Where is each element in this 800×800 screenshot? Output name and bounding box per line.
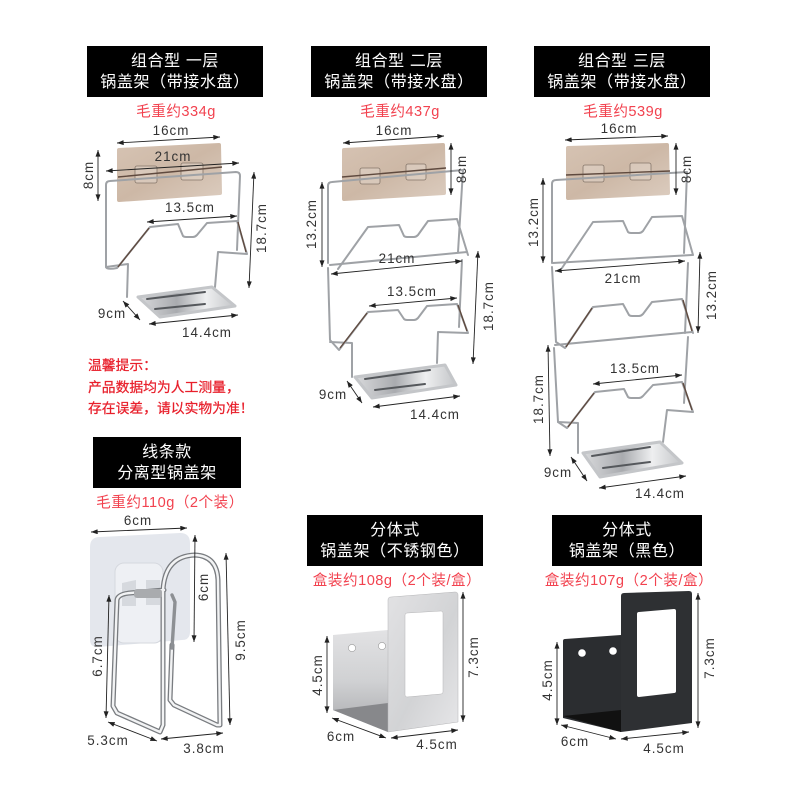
wire frame: [106, 172, 247, 297]
heading: two-tier: 组合型 二层: [355, 52, 443, 70]
dimensions: 5.3cm: [87, 733, 129, 748]
dimensions: 4.5cm: [643, 741, 685, 756]
heading: black: 锅盖架（黑色）: [569, 542, 685, 560]
dimensions: 9.5cm: [233, 619, 248, 661]
weight label: 毛重约334g: [136, 103, 216, 120]
dimensions: 14.4cm: [635, 486, 685, 501]
warm tip note: 产品数据均为人工测量，: [88, 380, 240, 395]
dimensions: [81, 123, 269, 340]
weight label: 毛重约437g: [360, 103, 440, 120]
dimensions: 21cm: [605, 271, 641, 286]
panel: line-style separate rack: [87, 437, 248, 756]
dimensions: 7.3cm: [466, 636, 481, 678]
dimensions: 6cm: [327, 729, 355, 744]
dimensions: 13.2cm: [304, 199, 319, 249]
dimensions: 13.5cm: [165, 200, 215, 215]
weight label: 盒装约107g（2个装/盒）: [545, 572, 713, 589]
dimensions: 18.7cm: [531, 374, 546, 424]
heading: stainless: 分体式: [370, 521, 420, 539]
drip tray: [355, 365, 456, 398]
adhesive plate: [566, 143, 670, 200]
dimensions: 4.5cm: [416, 737, 458, 752]
dimensions: 6.7cm: [90, 635, 105, 677]
dimensions: 3.8cm: [183, 741, 225, 756]
dimensions: 21cm: [155, 149, 191, 164]
heading: line-style: [93, 437, 241, 488]
dimensions: 6cm: [561, 734, 589, 749]
heading: line-style: 分离型锅盖架: [117, 464, 217, 482]
dimensions: 18.7cm: [254, 203, 269, 253]
adhesive plate: [342, 143, 446, 201]
heading: two-tier: 锅盖架（带接水盘）: [324, 72, 474, 91]
heading: line-style: 线条款: [142, 443, 192, 461]
heading: one-tier: 锅盖架（带接水盘）: [100, 72, 250, 91]
panel: three-tier rack: [526, 46, 719, 501]
dimensions: 13.2cm: [526, 197, 541, 247]
heading: black: 分体式: [602, 521, 652, 539]
wire frame: [328, 170, 468, 377]
black bracket product: [563, 591, 692, 732]
transparent adhesive plate: [90, 533, 190, 647]
drip tray: [583, 442, 682, 477]
dimensions: 21cm: [379, 251, 415, 266]
dimensions: 13.5cm: [387, 284, 437, 299]
dimensions: 13.2cm: [704, 270, 719, 320]
panel: stainless bracket: [307, 515, 483, 752]
dimensions: 9cm: [319, 387, 347, 402]
dimensions: 9cm: [544, 465, 572, 480]
drip tray: [138, 287, 235, 317]
dimensions: 14.4cm: [182, 325, 232, 340]
dimensions: 8cm: [679, 155, 694, 183]
heading: one-tier: [87, 46, 263, 97]
adhesive plate: [117, 143, 222, 202]
weight label: 毛重约110g（2个装）: [96, 494, 244, 511]
dimensions: 8cm: [454, 155, 469, 183]
dimensions: 18.7cm: [481, 281, 496, 331]
stainless bracket product: [333, 592, 458, 732]
heading: black: [552, 515, 702, 566]
heading: one-tier: 组合型 一层: [131, 52, 219, 70]
heading: three-tier: 锅盖架（带接水盘）: [547, 72, 697, 91]
heading: two-tier: [311, 46, 487, 97]
dimensions: 13.5cm: [610, 361, 660, 376]
dimensions: [526, 121, 719, 501]
warm tip note: [88, 358, 254, 416]
warm tip note: 存在误差，请以实物为准！: [88, 401, 254, 416]
dimensions: 14.4cm: [410, 407, 460, 422]
dimensions: 16cm: [376, 123, 412, 138]
panel: black bracket: [540, 515, 717, 756]
weight label: 盒装约108g（2个装/盒）: [313, 572, 481, 589]
heading: stainless: [307, 515, 483, 566]
dimensions: 16cm: [601, 121, 637, 136]
dimensions: [310, 592, 481, 752]
dimensions: [304, 123, 496, 422]
wire hook: [113, 555, 220, 732]
dimensions: [540, 593, 717, 756]
panel: two-tier rack: [304, 46, 496, 422]
wire frame: [552, 172, 693, 453]
dimensions: 8cm: [81, 161, 96, 189]
dimensions: 9cm: [98, 306, 126, 321]
dimensions: 16cm: [153, 123, 189, 138]
dimensions: 7.3cm: [702, 637, 717, 679]
warm tip note: 温馨提示：: [88, 358, 157, 373]
dimensions: 4.5cm: [310, 654, 325, 696]
weight label: 毛重约539g: [583, 103, 663, 120]
heading: three-tier: 组合型 三层: [578, 52, 666, 70]
dimensions: 6cm: [196, 573, 211, 601]
heading: stainless: 锅盖架（不锈钢色）: [320, 542, 470, 560]
dimensions: [87, 513, 248, 756]
dimensions: 6cm: [124, 513, 152, 528]
panel: one-tier rack: [81, 46, 269, 340]
dimensions: 4.5cm: [540, 659, 555, 701]
heading: three-tier: [534, 46, 710, 97]
